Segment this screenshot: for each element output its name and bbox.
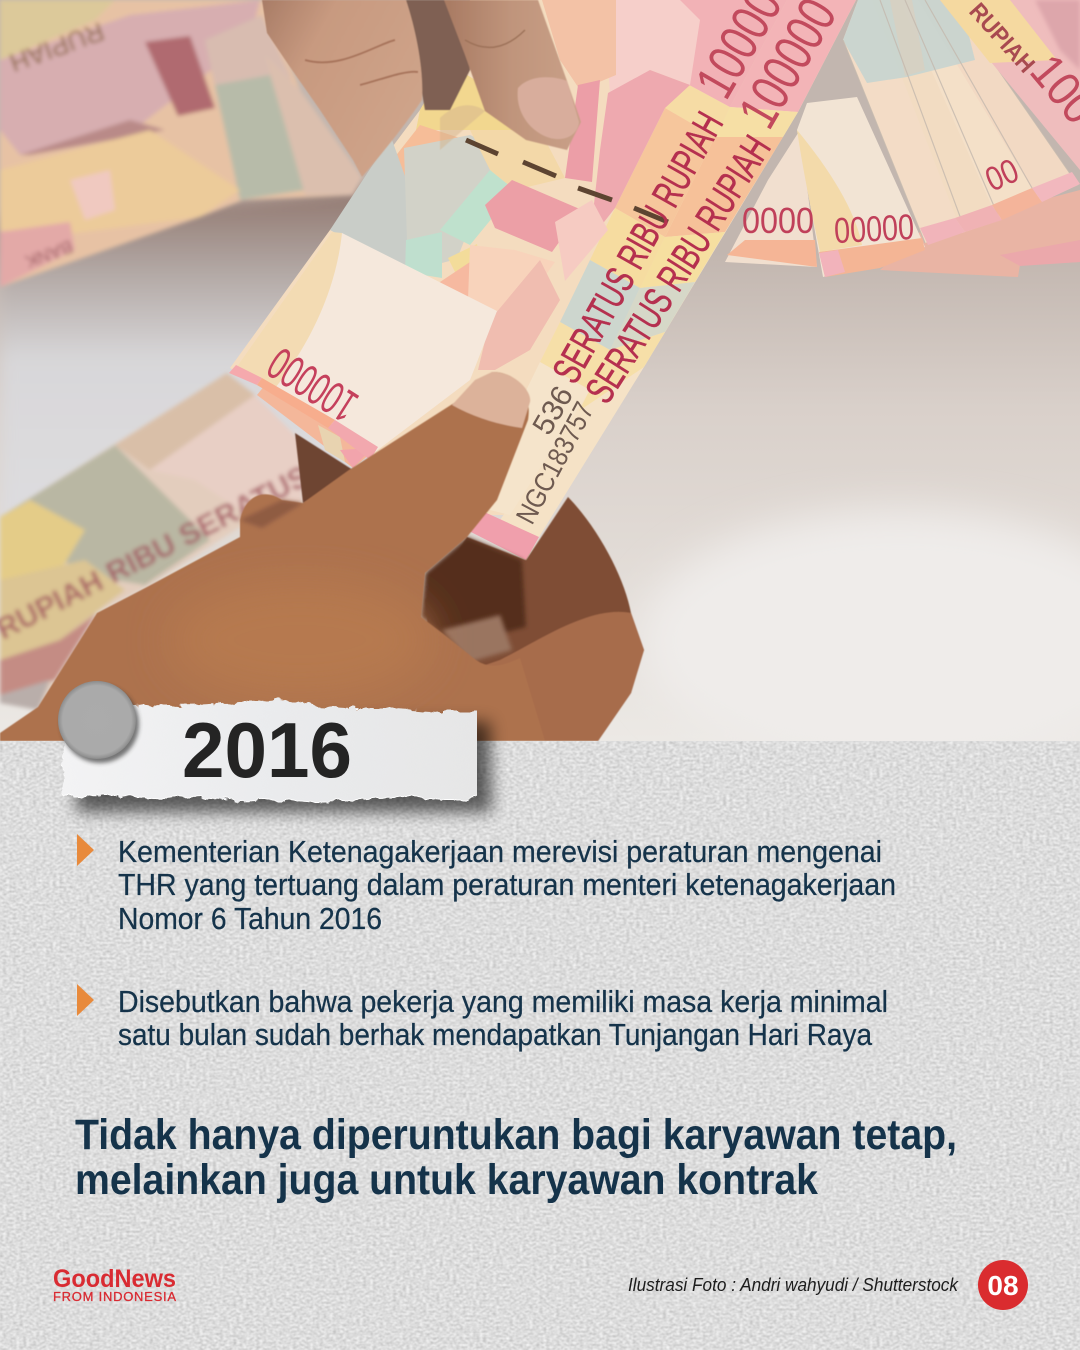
highlighted conclusion: melainkan juga untuk karyawan kontrak — [75, 1156, 818, 1204]
note with zeros — [797, 97, 925, 277]
blurred banknotes, bottom left — [0, 373, 315, 710]
security thread — [466, 140, 668, 222]
wall and table — [0, 0, 1080, 770]
fanned banknotes, right: 00 — [980, 152, 1024, 199]
main banknotes: NGC183757 — [510, 397, 600, 529]
bullet 1 text: THR yang tertuang dalam peraturan menteri ketenagakerjaan — [118, 867, 896, 902]
top of first note — [680, 0, 787, 107]
main banknotes — [229, 0, 856, 560]
torn paper label: 2016 — [63, 700, 492, 812]
bullet 1 text: Nomor 6 Tahun 2016 — [118, 901, 382, 936]
blurred banknotes, top left — [0, 0, 362, 287]
first note bands — [666, 86, 730, 134]
pale window — [276, 233, 497, 452]
blurred banknotes, top left: BANK — [23, 236, 75, 272]
blurred banknotes, bottom left: RUPIAH RIBU SERATUS — [0, 460, 315, 646]
logo: GoodNews from Indonesia: GoodNews — [53, 1265, 176, 1293]
main banknotes: 536 — [526, 381, 580, 440]
fanned banknotes, right: RUPIAH — [964, 0, 1040, 78]
bullet 2 text — [118, 984, 888, 1052]
highlighted conclusion — [75, 1111, 957, 1204]
bullet 2 text: satu bulan sudah berhak mendapatkan Tunjangan Hari Raya — [118, 1017, 873, 1052]
bullet 1 text — [118, 834, 896, 936]
back note lower — [500, 0, 856, 560]
pin — [58, 681, 139, 763]
note behind — [725, 130, 817, 267]
photo: hands exchanging rupiah banknotes — [0, 0, 1080, 770]
fanned banknotes, right: 00000 — [833, 206, 915, 251]
bottom hand: thumb and palm — [0, 372, 644, 741]
fanned banknotes, right — [725, 0, 1080, 277]
security guilloche blocks — [416, 75, 512, 130]
bullet 2 arrow — [77, 984, 94, 1016]
upper right note — [940, 0, 1080, 170]
fan — [843, 0, 965, 243]
logo: GoodNews from Indonesia — [53, 1265, 176, 1304]
year: 2016 — [182, 706, 352, 794]
bullet 2 text: Disebutkan bahwa pekerja yang memiliki masa kerja minimal — [118, 984, 888, 1019]
photo credit: Ilustrasi Foto : Andri wahyudi / Shutterstock — [628, 1275, 959, 1295]
bottom edges — [470, 513, 539, 560]
bullet 1 text: Kementerian Ketenagakerjaan merevisi peraturan mengenai — [118, 834, 882, 869]
lettering: SERATUS RIBU RUPIAH — [577, 128, 780, 411]
lower pink layer — [880, 190, 1080, 277]
page number badge — [978, 1260, 1028, 1310]
paper background — [0, 741, 1080, 1350]
fanned banknotes, right: 0000 — [742, 200, 814, 241]
bullet 1 arrow — [77, 834, 94, 866]
top hand: fingers and thumb — [262, 0, 581, 177]
blurred banknotes, top left: RUPIAH — [6, 16, 108, 78]
page number badge: 08 — [987, 1270, 1019, 1301]
highlighted conclusion: Tidak hanya diperuntukan bagi karyawan tetap, — [75, 1111, 957, 1159]
logo: GoodNews from Indonesia: FROM INDONESIA — [53, 1289, 176, 1304]
lettering — [554, 110, 771, 403]
main banknotes: 100000 — [258, 338, 366, 432]
second note bands — [730, 0, 856, 112]
